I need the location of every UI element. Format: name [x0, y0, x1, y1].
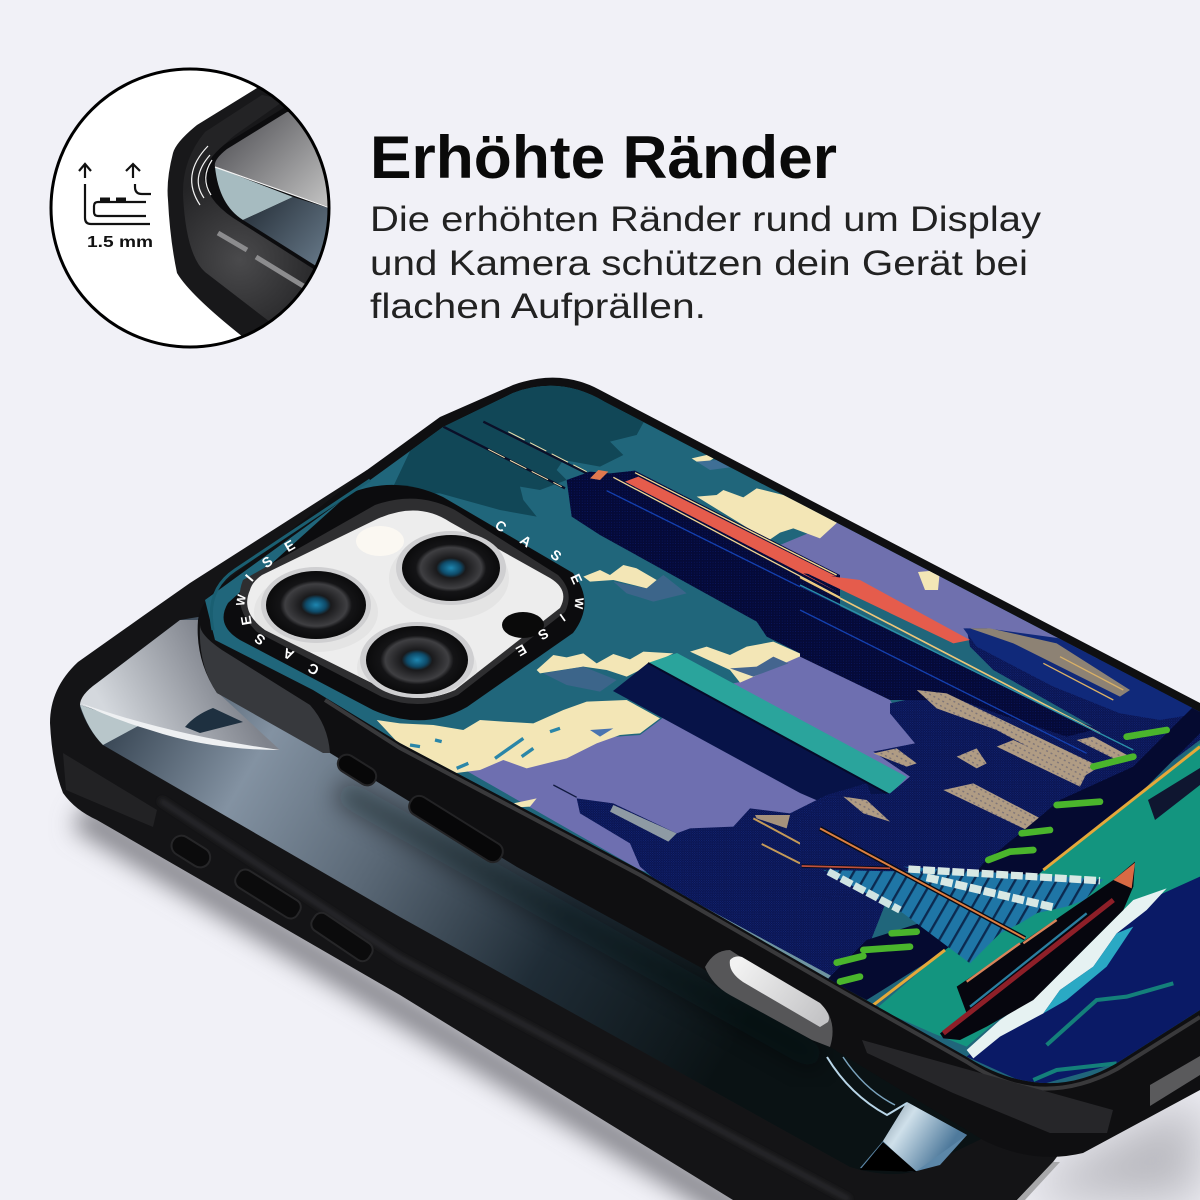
- brand ring text: S: [251, 630, 268, 649]
- water lines: [1033, 983, 1173, 1080]
- brand ring text: S: [259, 553, 276, 571]
- brand ring text: S: [547, 546, 565, 564]
- brand ring text: A: [280, 645, 296, 664]
- screen top reflection: [80, 620, 280, 750]
- front case body: [198, 378, 1200, 1157]
- brand ring text: A: [517, 531, 535, 550]
- city mass: [800, 628, 1200, 900]
- brand ring text: C: [305, 660, 321, 679]
- bottom bumper: [862, 1040, 1113, 1133]
- sky: [200, 370, 1200, 1090]
- dark wedge: [185, 708, 243, 733]
- dark sky: [390, 382, 647, 517]
- wallpaper glow: [860, 1102, 967, 1172]
- tower stripes: [635, 473, 837, 575]
- shadow bottom right: [1020, 1095, 1200, 1200]
- brand ring text: C: [492, 516, 510, 535]
- description text: [370, 200, 1042, 326]
- brand ring text: E: [513, 641, 530, 660]
- cloud behind tower right: [690, 642, 803, 683]
- left tower strip: [610, 805, 677, 842]
- description text: und Kamera schützen dein Gerät bei: [370, 244, 1028, 283]
- left frame bumper: [63, 753, 157, 827]
- red stripe: [625, 477, 840, 593]
- back phone screen: [80, 600, 1000, 1174]
- brand ring text: [233, 516, 586, 679]
- brand ring text: E: [567, 571, 586, 587]
- dome blue: [963, 628, 1200, 720]
- camera window: [247, 510, 563, 698]
- back phone port edge: [1017, 1162, 1060, 1200]
- description text: Die erhöhten Ränder rund um Display: [370, 200, 1042, 239]
- trees: [837, 730, 1167, 982]
- brand ring text: I: [557, 611, 568, 624]
- small cream fleck: [918, 570, 940, 590]
- empire tower: [567, 471, 840, 673]
- tan buildings: [917, 690, 1100, 777]
- rim highlight: [325, 700, 1200, 1089]
- dark tower end: [800, 587, 1093, 737]
- lens: top: [396, 531, 506, 605]
- phone artwork: pixel city: [200, 370, 1200, 1090]
- charging port: [705, 950, 833, 1047]
- sails: [903, 867, 1103, 917]
- dome tan cap: [970, 628, 1130, 697]
- brand ring text: S: [535, 625, 552, 644]
- black triangle: [860, 1142, 917, 1172]
- lower left city: [553, 783, 900, 993]
- lidar: [502, 612, 544, 638]
- icon: raised edge diagram: [79, 164, 151, 224]
- shadow under back phone: [80, 815, 745, 1200]
- tower stripes end: [800, 577, 1100, 733]
- brand ring text: W: [233, 593, 249, 607]
- far boat: [1148, 768, 1200, 820]
- back phone frame: [50, 470, 1100, 1200]
- heading: Erhöhte Ränder: [370, 124, 837, 191]
- right city, reference crop coordinates: [800, 567, 1200, 900]
- lower cloud: [377, 700, 660, 807]
- spires: [443, 422, 590, 488]
- deep water: [967, 877, 1200, 1087]
- purple sky lower: [468, 656, 915, 872]
- back phone side buttons: [168, 832, 376, 964]
- description text: flachen Aufprällen.: [370, 287, 706, 326]
- back phone: [50, 470, 1100, 1200]
- dark shore: [827, 700, 1200, 1000]
- brand ring text: E: [281, 536, 298, 555]
- island teal edge: [211, 480, 370, 630]
- frame ridge highlight: [160, 800, 850, 1200]
- front side buttons: [334, 751, 506, 866]
- harbour, reference crop coordinates: [802, 700, 1200, 1087]
- front phone: [198, 370, 1200, 1157]
- screen light band: [80, 705, 140, 745]
- mast: [820, 828, 1025, 938]
- wave: [967, 888, 1167, 1058]
- lens: left: [261, 567, 371, 643]
- camera well: [240, 499, 569, 704]
- red stripe end: [808, 574, 970, 644]
- cream cloud top: [697, 488, 840, 541]
- teal tower: [613, 663, 890, 806]
- inset case photo: [168, 88, 328, 336]
- cloud behind tower left: [537, 652, 673, 677]
- island base: [224, 485, 585, 720]
- small cloud: [692, 455, 714, 462]
- brand ring text: W: [571, 597, 586, 610]
- lens rings: [254, 536, 509, 706]
- mid cloud: [583, 565, 657, 588]
- detail inset: raised edge: [51, 69, 345, 347]
- upper part of art, reference crop coordinates: [390, 382, 840, 692]
- shadow from front phone: [340, 790, 820, 1060]
- left translucent bumper: [200, 625, 330, 753]
- water: [877, 743, 1200, 1047]
- right port grille: [1150, 1056, 1200, 1106]
- camera island: [211, 480, 586, 720]
- flash: [356, 526, 404, 556]
- brand ring text: I: [242, 571, 257, 584]
- brand ring text: E: [237, 614, 255, 626]
- ship hull: [940, 862, 1135, 1040]
- label: 1.5 mm: 1.5 mm: [87, 234, 153, 251]
- purple sky upper: [780, 520, 1110, 660]
- cloud pixels: [410, 728, 560, 768]
- lens: bottom: [360, 622, 474, 698]
- white curve: [80, 703, 280, 750]
- shoreline: [873, 747, 1200, 1005]
